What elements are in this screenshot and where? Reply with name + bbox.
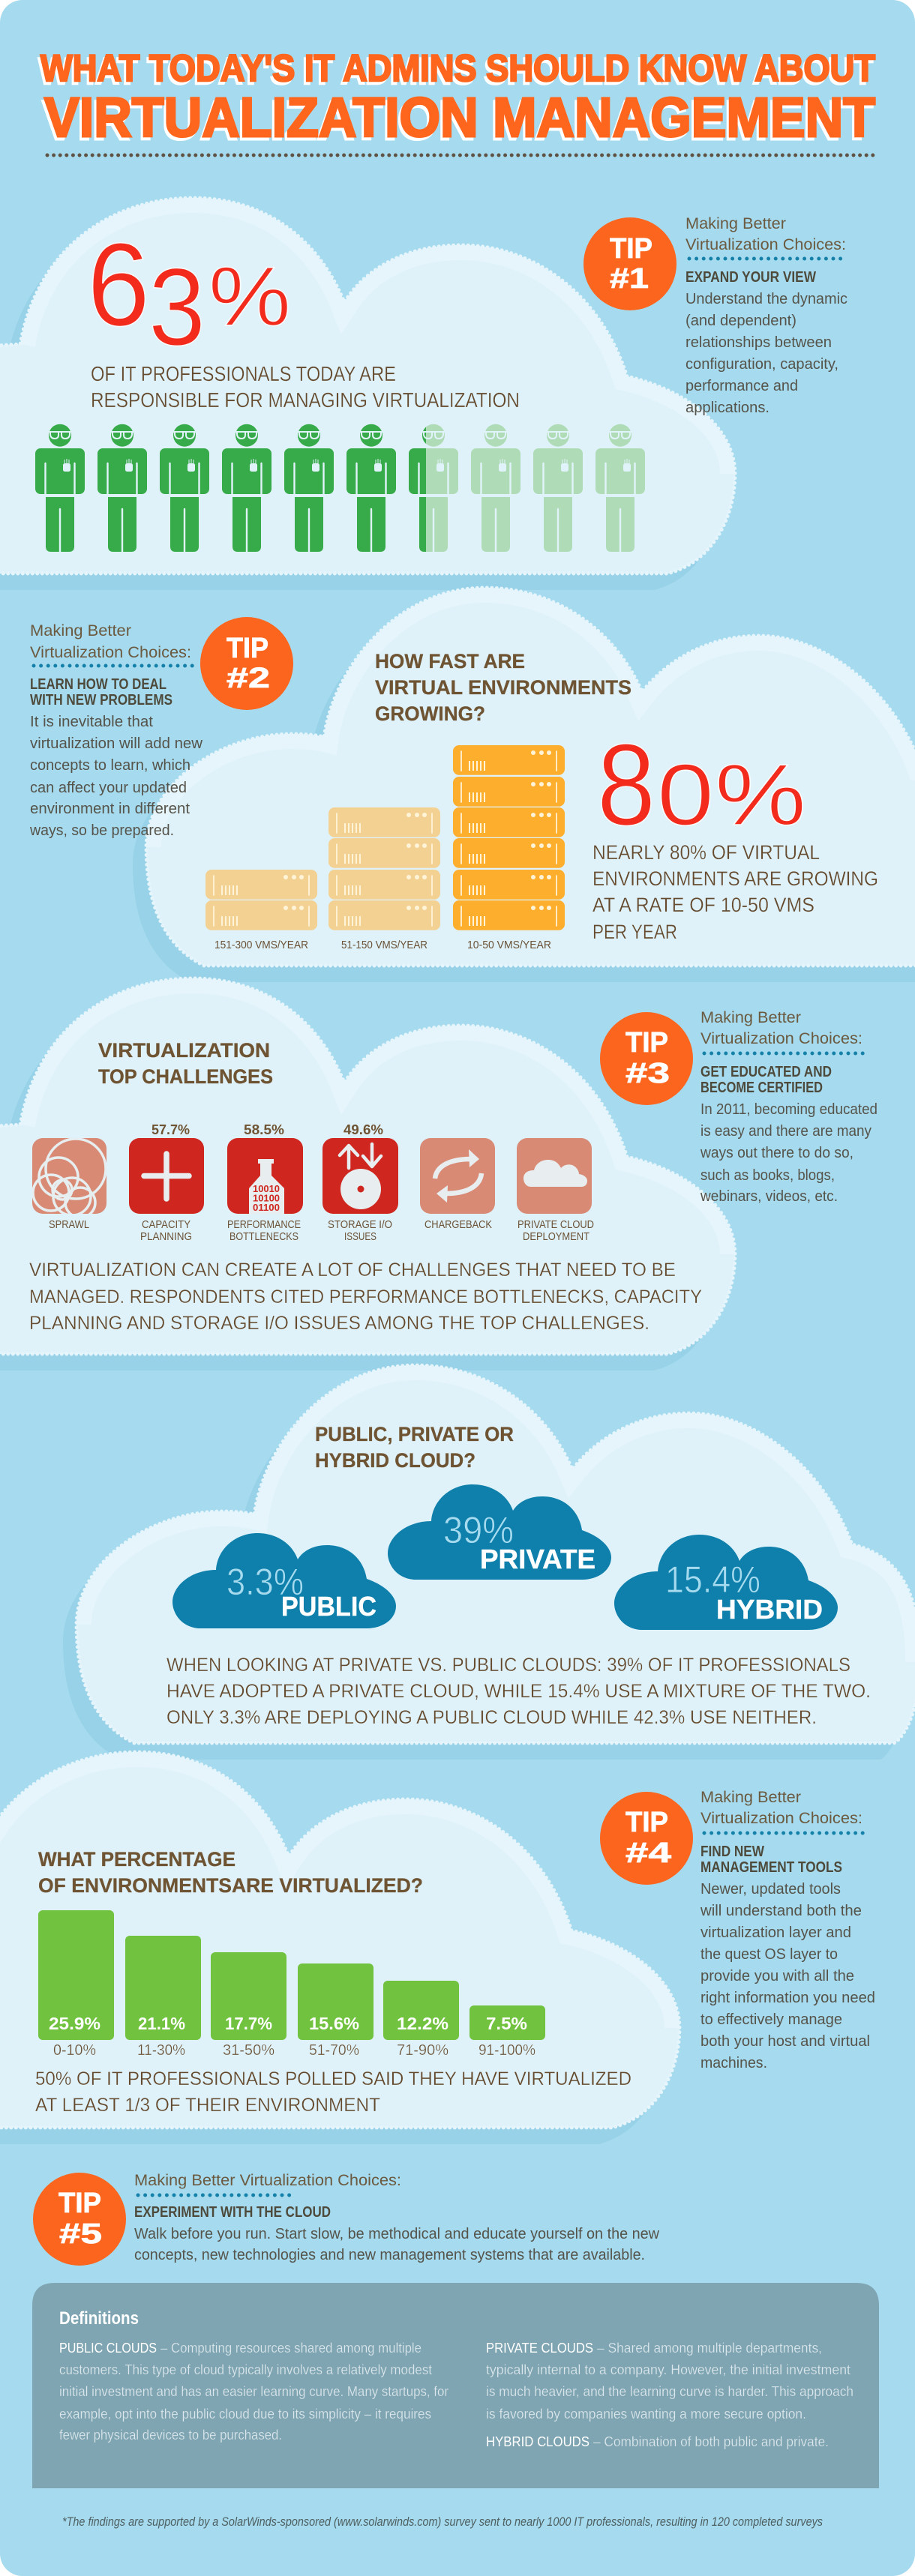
big number 80%: 8 xyxy=(597,720,656,849)
80% caption: AT A RATE OF 10-50 VMS xyxy=(592,894,814,916)
challenges paragraph: VIRTUALIZATION CAN CREATE A LOT OF CHALLENGES THAT NEED TO BE xyxy=(29,1260,676,1281)
tip 2 text: Making Better xyxy=(30,622,131,640)
tip 1 text: relationships between xyxy=(686,334,832,351)
heading: percentage virtualized: OF ENVIRONMENTSARE VIRTUALIZED? xyxy=(38,1874,423,1897)
server stacks chart: 10-50 VMS/YEAR xyxy=(467,939,551,951)
tip 1 text xyxy=(686,215,848,416)
cloud: public 3.3%: 3.3% xyxy=(226,1561,304,1603)
bar chart: 91-100% xyxy=(478,2042,536,2059)
definition: private clouds: – Shared among multiple departments, xyxy=(597,2341,822,2356)
challenge percentages xyxy=(152,1125,382,1134)
tip 3 text: Making Better xyxy=(700,1009,801,1026)
cloud: public 3.3% xyxy=(172,1533,396,1628)
challenge labels: PERFORMANCE xyxy=(227,1218,301,1231)
definition: private clouds xyxy=(486,2341,854,2422)
title: VIRTUALIZATION MANAGEMENT xyxy=(44,86,875,148)
bar chart: 11-30% xyxy=(137,2042,185,2059)
bar chart: 12.2% xyxy=(397,2014,448,2033)
tip 1 text: (and dependent) xyxy=(686,313,796,329)
definition: public clouds: initial investment and has an easier learning curve. Many startups, for xyxy=(59,2384,448,2399)
definition: private clouds: PRIVATE CLOUDS xyxy=(486,2341,593,2356)
tip 5 badge: #5 xyxy=(59,2218,102,2250)
definition: public clouds xyxy=(59,2341,448,2443)
heading: how fast: GROWING? xyxy=(375,702,485,725)
definition: hybrid clouds: – Combination of both public and private. xyxy=(593,2434,829,2449)
tip 1 badge xyxy=(584,217,676,310)
bar chart: 51-70% xyxy=(309,2042,359,2059)
icon: capacity planning xyxy=(129,1138,204,1214)
80% caption xyxy=(592,841,878,943)
heading: how fast: VIRTUAL ENVIRONMENTS xyxy=(375,676,632,699)
tip 3 text: webinars, videos, etc. xyxy=(700,1188,838,1205)
server stacks chart: 51-150 VMS/YEAR xyxy=(341,939,428,951)
challenge labels: BOTTLENECKS xyxy=(230,1230,298,1243)
tip 3 badge: TIP xyxy=(626,1027,668,1059)
tip 4 text: both your host and virtual xyxy=(700,2033,870,2050)
tip 2 text: WITH NEW PROBLEMS xyxy=(30,692,172,708)
heading: top challenges xyxy=(98,1043,273,1084)
tip 2 text: LEARN HOW TO DEAL xyxy=(30,676,166,693)
bar chart xyxy=(38,1910,545,2059)
icon: storage IO xyxy=(322,1138,398,1214)
tip 1 text: EXPAND YOUR VIEW xyxy=(686,269,816,286)
cloud: private 39%: PRIVATE xyxy=(480,1544,596,1574)
tip 1 text: Making Better xyxy=(686,215,786,232)
tip 4 text xyxy=(700,1789,875,2071)
bar chart: 31-50% xyxy=(223,2042,274,2059)
tip 4 badge: TIP xyxy=(626,1807,668,1838)
tip 5 text xyxy=(134,2172,660,2263)
cloud types paragraph xyxy=(166,1658,869,1724)
heading: percentage virtualized: WHAT PERCENTAGE xyxy=(38,1848,236,1871)
challenge labels: PLANNING xyxy=(140,1230,192,1243)
tip 4 text: Newer, updated tools xyxy=(700,1881,841,1898)
tip 1 text: Understand the dynamic xyxy=(686,291,848,307)
tip 3 badge: #3 xyxy=(626,1058,670,1089)
people pictogram: 63 percent of ten figures xyxy=(35,424,645,552)
tip 4 text: provide you with all the xyxy=(700,1968,854,1984)
cloud: hybrid 15.4%: HYBRID xyxy=(716,1594,823,1625)
tip 3 text: In 2011, becoming educated xyxy=(700,1101,878,1118)
cloud: hybrid 15.4%: 15.4% xyxy=(665,1559,760,1601)
tip 2 text xyxy=(29,622,203,839)
tip 2 text: It is inevitable that xyxy=(30,714,153,730)
tip 1 text: Virtualization Choices: xyxy=(686,236,846,253)
tip 2 badge: #2 xyxy=(226,663,270,694)
heading: public private hybrid: HYBRID CLOUD? xyxy=(315,1449,476,1472)
tip 3 text: is easy and there are many xyxy=(700,1123,872,1140)
big number 63%: % xyxy=(208,250,291,343)
tip 3 text: Virtualization Choices: xyxy=(700,1030,862,1047)
cloud 1 shape xyxy=(0,198,735,590)
challenge labels: ISSUES xyxy=(344,1230,376,1243)
big number 80%: % xyxy=(715,746,806,843)
challenge percentages: 57.7% xyxy=(152,1122,190,1137)
bar chart: 0-10% xyxy=(53,2042,96,2059)
icon: performance bottlenecks: 10010 xyxy=(253,1184,280,1194)
big number 80%: 0 xyxy=(657,746,714,843)
definition: public clouds: PUBLIC CLOUDS xyxy=(59,2341,157,2356)
heading: how fast: HOW FAST ARE xyxy=(375,650,525,672)
bar chart: 25.9% xyxy=(49,2014,100,2033)
virtualized paragraph: 50% OF IT PROFESSIONALS POLLED SAID THEY HAVE VIRTUALIZED xyxy=(35,2068,632,2089)
cloud 2 shape xyxy=(133,588,915,982)
80% caption: ENVIRONMENTS ARE GROWING xyxy=(592,867,878,890)
80% caption: NEARLY 80% OF VIRTUAL xyxy=(592,841,820,864)
bar chart: 15.6% xyxy=(309,2014,359,2033)
challenge labels: DEPLOYMENT xyxy=(523,1230,590,1243)
challenge labels: PRIVATE CLOUD xyxy=(518,1218,594,1231)
heading: top challenges: VIRTUALIZATION xyxy=(98,1039,270,1062)
bar chart: 21.1% xyxy=(138,2014,185,2033)
cloud: hybrid 15.4% xyxy=(614,1535,838,1630)
tip 5 text: Making Better Virtualization Choices: xyxy=(134,2172,401,2189)
big number 63% xyxy=(92,242,288,346)
definition: private clouds: is much heavier, and the learning curve is harder. This approach xyxy=(486,2384,854,2399)
title xyxy=(38,47,875,151)
tip 2 text: can affect your updated xyxy=(30,780,187,796)
tip 4 text: will understand both the xyxy=(700,1903,862,1919)
tip 2 text: concepts to learn, which xyxy=(30,757,190,774)
big number 63%: 6 xyxy=(87,219,150,351)
challenge labels: CAPACITY xyxy=(142,1218,190,1231)
definition: public clouds: customers. This type of cloud typically involves a relatively modest xyxy=(59,2362,432,2377)
tip 4 text: MANAGEMENT TOOLS xyxy=(700,1859,842,1876)
cloud types paragraph: HAVE ADOPTED A PRIVATE CLOUD, WHILE 15.4% USE A MIXTURE OF THE TWO. xyxy=(166,1681,871,1702)
tip 1 text: performance and xyxy=(686,378,798,394)
heading: how fast xyxy=(375,654,632,721)
virtualized paragraph xyxy=(35,2071,631,2111)
tip 3 text: GET EDUCATED AND xyxy=(700,1064,832,1080)
tip 4 text: the quest OS layer to xyxy=(700,1946,838,1963)
tip 2 badge: TIP xyxy=(226,633,268,664)
heading: public private hybrid xyxy=(316,1427,514,1468)
server stacks chart xyxy=(206,745,565,951)
challenge labels xyxy=(50,1220,594,1240)
tip 1 badge: #1 xyxy=(610,263,649,295)
heading: percentage virtualized xyxy=(38,1852,422,1892)
bar chart: 71-90% xyxy=(397,2042,448,2059)
panel: definitions xyxy=(32,2283,879,2488)
icon: performance bottlenecks: 10100 xyxy=(253,1194,280,1204)
tip 5 text: concepts, new technologies and new management systems that are available. xyxy=(134,2247,645,2263)
tip 5 badge xyxy=(33,2173,126,2266)
tip 3 text xyxy=(700,1009,878,1205)
challenges paragraph: PLANNING AND STORAGE I/O ISSUES AMONG THE TOP CHALLENGES. xyxy=(29,1313,650,1334)
challenge percentages: 49.6% xyxy=(344,1122,383,1137)
tip 2 text: ways, so be prepared. xyxy=(29,822,174,839)
cloud 3 shape xyxy=(0,978,735,1370)
tip 4 text: machines. xyxy=(700,2055,767,2071)
cloud 4 shape xyxy=(63,1365,915,1760)
challenge labels: SPRAWL xyxy=(49,1218,89,1231)
challenge percentages: 58.5% xyxy=(244,1122,284,1137)
challenges paragraph xyxy=(29,1263,702,1329)
63% caption: RESPONSIBLE FOR MANAGING VIRTUALIZATION xyxy=(91,388,520,412)
challenge labels: STORAGE I/O xyxy=(328,1218,392,1231)
80% caption: PER YEAR xyxy=(592,921,677,943)
tip 5 text: EXPERIMENT WITH THE CLOUD xyxy=(134,2204,331,2221)
tip 4 text: to effectively manage xyxy=(700,2011,842,2028)
cloud 5 shape xyxy=(0,1752,680,2144)
tip 4 text: Making Better xyxy=(700,1789,801,1806)
definition: public clouds: fewer physical devices to be purchased. xyxy=(59,2428,282,2443)
definition: private clouds: is favored by companies wanting a more secure option. xyxy=(486,2407,806,2422)
tip 3 text: ways out there to do so, xyxy=(700,1145,854,1161)
challenge labels: CHARGEBACK xyxy=(424,1218,492,1231)
63% caption xyxy=(92,366,518,408)
tip 2 text: environment in different xyxy=(30,801,190,817)
virtualized paragraph: AT LEAST 1/3 OF THEIR ENVIRONMENT xyxy=(35,2095,380,2116)
definition: private clouds: typically internal to a company. However, the initial investment xyxy=(486,2362,850,2377)
server stacks chart: 151-300 VMS/YEAR xyxy=(214,939,308,951)
title: VIRTUALIZATION MANAGEMENT xyxy=(42,89,873,151)
tip 1 badge: TIP xyxy=(610,233,652,265)
cloud: private 39%: 39% xyxy=(443,1509,514,1551)
tip 1 text: configuration, capacity, xyxy=(686,356,838,373)
cloud types paragraph: WHEN LOOKING AT PRIVATE VS. PUBLIC CLOUDS: 39% OF IT PROFESSIONALS xyxy=(166,1655,850,1676)
tip 3 text: such as books, blogs, xyxy=(700,1167,835,1184)
definition: hybrid clouds xyxy=(486,2434,829,2449)
bar chart: 7.5% xyxy=(486,2014,527,2033)
definition: public clouds: example, opt into the public cloud due to its simplicity – it requires xyxy=(59,2407,431,2422)
definition: hybrid clouds: HYBRID CLOUDS xyxy=(486,2434,590,2449)
tip 4 text: FIND NEW xyxy=(700,1844,764,1860)
definitions heading: Definitions xyxy=(59,2308,139,2329)
icon: performance bottlenecks xyxy=(227,1138,303,1214)
definition: public clouds: – Computing resources shared among multiple xyxy=(160,2341,422,2356)
icon: sprawl xyxy=(32,1138,106,1218)
tip 5 text: Walk before you run. Start slow, be methodical and educate yourself on the new xyxy=(134,2226,660,2242)
tip 4 badge: #4 xyxy=(626,1838,671,1869)
icon: chargeback xyxy=(420,1138,495,1214)
icon: private cloud deployment xyxy=(517,1138,592,1214)
tip 4 text: Virtualization Choices: xyxy=(700,1810,862,1827)
big number 80% xyxy=(602,743,803,826)
tip 1 text: applications. xyxy=(686,400,770,416)
icon: performance bottlenecks: 01100 xyxy=(253,1203,280,1213)
tip 2 badge xyxy=(200,617,293,710)
tip 3 badge xyxy=(600,1012,693,1105)
tip 3 text: BECOME CERTIFIED xyxy=(700,1080,823,1096)
tip 4 badge xyxy=(600,1792,693,1885)
big number 63%: 3 xyxy=(148,246,206,369)
tip 4 text: virtualization layer and xyxy=(700,1925,851,1941)
bar chart: 17.7% xyxy=(225,2014,272,2033)
tip 5 badge: TIP xyxy=(58,2188,101,2219)
63% caption: OF IT PROFESSIONALS TODAY ARE xyxy=(91,362,396,385)
tip 2 text: Virtualization Choices: xyxy=(30,644,191,661)
cloud: private 39% xyxy=(388,1484,611,1580)
cloud: public 3.3%: PUBLIC xyxy=(281,1591,376,1622)
tip 4 text: right information you need xyxy=(700,1990,875,2006)
tip 2 text: virtualization will add new xyxy=(30,735,203,752)
heading: public private hybrid: PUBLIC, PRIVATE OR xyxy=(315,1423,514,1445)
challenges paragraph: MANAGED. RESPONDENTS CITED PERFORMANCE BOTTLENECKS, CAPACITY xyxy=(29,1287,702,1307)
cloud types paragraph: ONLY 3.3% ARE DEPLOYING A PUBLIC CLOUD WHILE 42.3% USE NEITHER. xyxy=(166,1707,817,1728)
heading: top challenges: TOP CHALLENGES xyxy=(98,1065,273,1088)
